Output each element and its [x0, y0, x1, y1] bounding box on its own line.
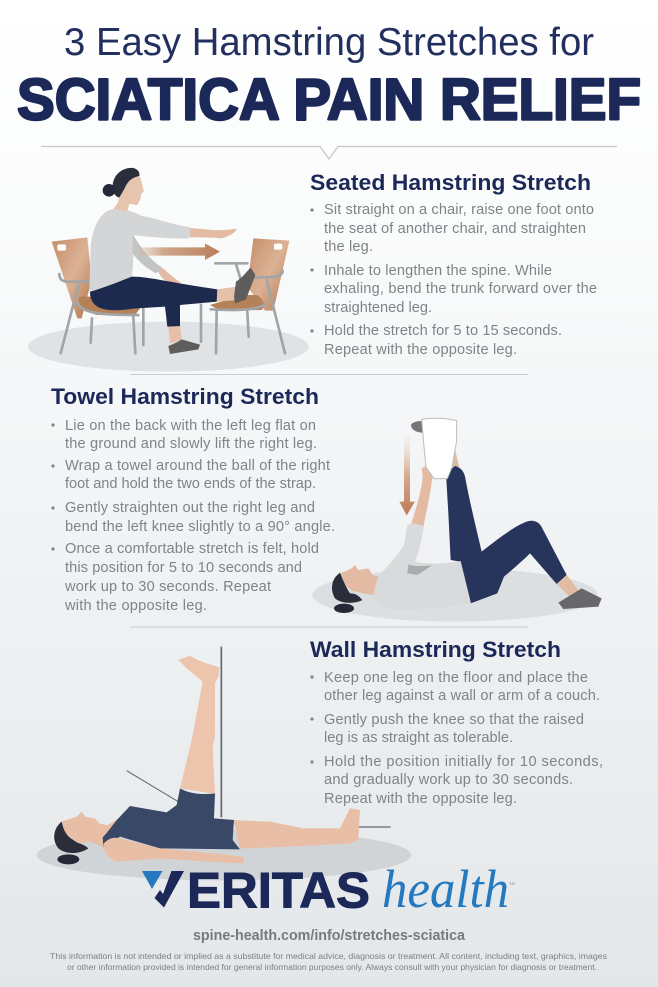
- text: seated hamstring stretch: Repeat with the opposite leg.: [324, 342, 517, 358]
- text: towel hamstring stretch: [51, 384, 335, 614]
- illustration: towel hamstring stretch: [312, 418, 602, 622]
- woman: lying with towel: [332, 418, 602, 613]
- title: [17, 21, 641, 132]
- text: towel hamstring stretch: foot and hold the two ends of the strap.: [65, 476, 316, 492]
- text: wall hamstring stretch: other leg against a wall or arm of a couch.: [324, 688, 600, 704]
- text: towel hamstring stretch: Gently straighten out the right leg and: [65, 500, 315, 516]
- text: wall hamstring stretch: leg is as straight as tolerable.: [324, 730, 513, 746]
- text: towel hamstring stretch: bend the left knee slightly to a 90° angle.: [65, 519, 335, 535]
- arrow: downward: [399, 435, 415, 515]
- website url: spine-health.com/info/stretches-sciatica: [193, 927, 466, 944]
- logo: Veritas Health: [142, 859, 515, 919]
- logo: Veritas Health: ERITAS: [187, 862, 370, 918]
- left chair: [52, 237, 143, 353]
- text: seated hamstring stretch: the leg.: [324, 239, 373, 255]
- text: seated hamstring stretch: Inhale to lengthen the spine. While: [324, 263, 552, 279]
- text: seated hamstring stretch: Seated Hamstring Stretch: [310, 170, 591, 195]
- woman: seated: [89, 168, 255, 354]
- disclaimer: This information is not intended or implied as a substitute for medical advice, diagnosis or treatment. All content, including text, graphics, images: [50, 951, 607, 961]
- text: seated hamstring stretch: exhaling, bend the trunk forward over the: [324, 281, 597, 297]
- text: towel hamstring stretch: with the opposite leg.: [64, 598, 207, 614]
- text: towel hamstring stretch: Towel Hamstring Stretch: [51, 384, 319, 409]
- text: wall hamstring stretch: [310, 637, 603, 807]
- text: seated hamstring stretch: straightened leg.: [324, 300, 432, 316]
- logo: Veritas Health: TM: [509, 881, 515, 886]
- disclaimer: or other information provided is intended for general information purposes only. Always consult with your physician for diagnosis or treatment.: [67, 962, 597, 972]
- logo: Veritas Health: health: [382, 859, 509, 919]
- text: towel hamstring stretch: the ground and slowly lift the right leg.: [65, 436, 317, 452]
- text: towel hamstring stretch: Wrap a towel around the ball of the right: [65, 458, 330, 474]
- text: towel hamstring stretch: work up to 30 seconds. Repeat: [64, 579, 271, 595]
- text: seated hamstring stretch: the seat of another chair, and straighten: [324, 221, 586, 237]
- text: wall hamstring stretch: Gently push the knee so that the raised: [324, 712, 584, 728]
- illustration: wall hamstring stretch: [37, 647, 411, 880]
- text: seated hamstring stretch: Sit straight on a chair, raise one foot onto: [324, 202, 594, 218]
- wall and guide lines: [127, 647, 391, 827]
- text: wall hamstring stretch: and gradually work up to 30 seconds.: [324, 772, 573, 788]
- text: wall hamstring stretch: Keep one leg on the floor and place the: [324, 670, 588, 686]
- text: wall hamstring stretch: Repeat with the opposite leg.: [324, 791, 517, 807]
- right chair: [201, 238, 289, 353]
- title: SCIATICA PAIN RELIEF: [17, 68, 641, 132]
- title: 3 Easy Hamstring Stretches for: [64, 21, 594, 64]
- text: towel hamstring stretch: Once a comfortable stretch is felt, hold: [65, 541, 319, 557]
- text: seated hamstring stretch: Hold the stretch for 5 to 15 seconds.: [324, 323, 562, 339]
- text: wall hamstring stretch: Hold the position initially for 10 seconds,: [324, 754, 603, 770]
- text: wall hamstring stretch: Wall Hamstring Stretch: [310, 637, 561, 662]
- text: seated hamstring stretch: [310, 170, 597, 358]
- disclaimer: [50, 951, 607, 972]
- arrow: forward: [138, 243, 220, 260]
- text: towel hamstring stretch: this position for 5 to 10 seconds and: [65, 560, 302, 576]
- woman: lying with raised leg: [54, 656, 360, 864]
- top divider with notch: [41, 146, 617, 159]
- illustration: seated hamstring stretch: [28, 168, 309, 372]
- text: towel hamstring stretch: Lie on the back with the left leg flat on: [65, 418, 316, 434]
